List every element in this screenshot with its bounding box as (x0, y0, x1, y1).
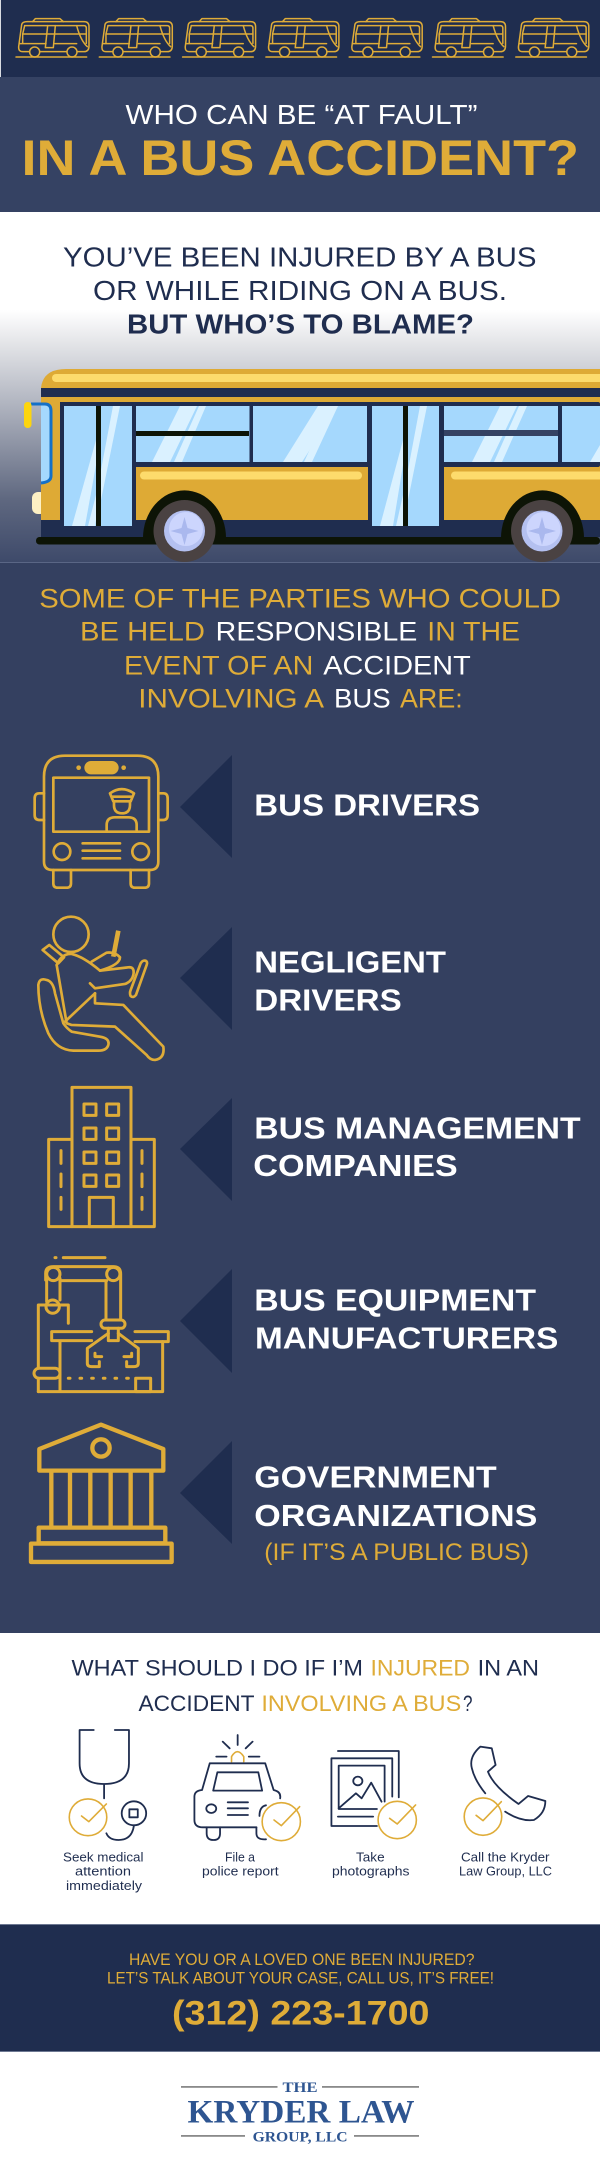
intro statement: BUS (334, 684, 391, 714)
wheel front (143, 490, 226, 562)
caption: File a (225, 1850, 256, 1864)
item: bus equipment manufacturers (34, 1258, 558, 1392)
question heading: INVOLVING A BUS (261, 1691, 461, 1716)
intro statement: BE HELD (80, 617, 205, 647)
window reflections (72, 406, 600, 526)
icon: bus front with driver (35, 756, 168, 888)
icon: police car with check (194, 1735, 300, 1841)
call to action text: HAVE YOU OR A LOVED ONE BEEN INJURED? (129, 1950, 474, 1969)
caption: police report (202, 1864, 279, 1879)
question heading: IN AN (478, 1656, 539, 1681)
label: (IF IT’S A PUBLIC BUS) (264, 1539, 529, 1566)
phone number: (312) 223-1700 (172, 1994, 430, 2032)
intro statement: RESPONSIBLE (216, 617, 417, 647)
icon: photographs with check (331, 1751, 416, 1839)
item: government organizations (31, 1425, 537, 1566)
label: MANUFACTURERS (255, 1321, 558, 1356)
intro statement: ARE: (400, 684, 463, 714)
caption: Seek medical (63, 1850, 144, 1864)
label: BUS MANAGEMENT (254, 1110, 581, 1145)
windows (64, 406, 600, 526)
pointer triangle (180, 755, 232, 858)
pointer triangle (180, 1441, 232, 1544)
hero text line 1: YOU’VE BEEN INJURED BY A BUS (63, 242, 536, 272)
icon: telephone with check (464, 1747, 545, 1835)
icon: seated driver with phone (38, 917, 164, 1060)
intro statement: EVENT OF AN (124, 651, 313, 681)
logo: The Kryder Law Group: THE (282, 2080, 318, 2096)
logo: The Kryder Law Group: GROUP, LLC (253, 2130, 348, 2146)
intro statement (39, 583, 561, 714)
label (254, 944, 446, 1018)
logo: The Kryder Law Group: KRYDER LAW (188, 2094, 414, 2130)
caption: immediately (66, 1878, 143, 1893)
intro statement: SOME OF THE PARTIES WHO COULD (39, 583, 561, 613)
call to action banner (0, 1924, 600, 2052)
call to action text (107, 1950, 494, 1988)
title line 1: WHO CAN BE “AT FAULT” (126, 99, 478, 130)
logo: The Kryder Law Group (181, 2080, 419, 2146)
caption (202, 1850, 279, 1879)
title panel (0, 77, 600, 212)
question heading: INJURED (370, 1656, 470, 1681)
roof (41, 369, 600, 397)
hero text line 3: BUT WHO’S TO BLAME? (127, 308, 474, 340)
intro statement: ACCIDENT (323, 651, 471, 681)
caption (63, 1850, 144, 1893)
body (41, 397, 600, 520)
icon: robotic factory arm (34, 1258, 168, 1392)
intro statement: IN THE (427, 617, 520, 647)
pointer triangle (180, 1269, 232, 1373)
step: seek medical attention (63, 1730, 146, 1893)
question heading (72, 1656, 539, 1716)
wheel rear (501, 490, 584, 562)
label: ORGANIZATIONS (254, 1498, 537, 1533)
step: take photographs (331, 1751, 416, 1879)
caption: Take (356, 1850, 385, 1864)
caption: Call the Kryder (461, 1850, 550, 1864)
title line 2: IN A BUS ACCIDENT? (22, 130, 579, 186)
hero text line 2: OR WHILE RIDING ON A BUS. (93, 275, 507, 306)
step: call the law group (459, 1747, 552, 1879)
door bars and window bars (96, 406, 558, 526)
label: NEGLIGENT (254, 944, 446, 979)
yellow bus illustration (24, 369, 600, 562)
item: negligent drivers (38, 917, 446, 1060)
step: file a police report (194, 1735, 300, 1879)
caption: attention (75, 1864, 131, 1879)
question heading: WHAT SHOULD I DO IF I’M (72, 1656, 363, 1681)
label: BUS EQUIPMENT (254, 1283, 536, 1318)
question heading: ACCIDENT (138, 1691, 254, 1716)
intro statement: INVOLVING A (138, 684, 324, 714)
mirror (24, 402, 51, 483)
label (254, 1459, 537, 1566)
label: BUS DRIVERS (254, 787, 480, 822)
caption: photographs (332, 1864, 410, 1879)
item: bus management companies (49, 1087, 581, 1227)
icon: stethoscope with check (69, 1730, 146, 1840)
label (253, 1110, 581, 1183)
icon: office building (49, 1087, 154, 1227)
caption (459, 1850, 552, 1879)
label: DRIVERS (254, 983, 402, 1018)
question heading: ? (463, 1691, 472, 1716)
item: bus drivers (35, 755, 480, 888)
headlight (32, 492, 46, 514)
panel highlights (140, 472, 600, 480)
hero panel with gradient (0, 212, 600, 562)
call to action text: LET’S TALK ABOUT YOUR CASE, CALL US, IT’S FREE! (107, 1968, 494, 1988)
label: COMPANIES (253, 1148, 458, 1183)
caption (332, 1850, 410, 1879)
label (254, 1283, 558, 1356)
pointer triangle (180, 927, 232, 1030)
icon: government building (31, 1425, 172, 1562)
caption: Law Group, LLC (459, 1864, 552, 1879)
label: GOVERNMENT (254, 1459, 497, 1494)
top bar with bus icons (0, 0, 600, 77)
pointer triangle (180, 1098, 232, 1201)
main navy panel (0, 562, 600, 1633)
what to do panel (0, 1633, 600, 1924)
